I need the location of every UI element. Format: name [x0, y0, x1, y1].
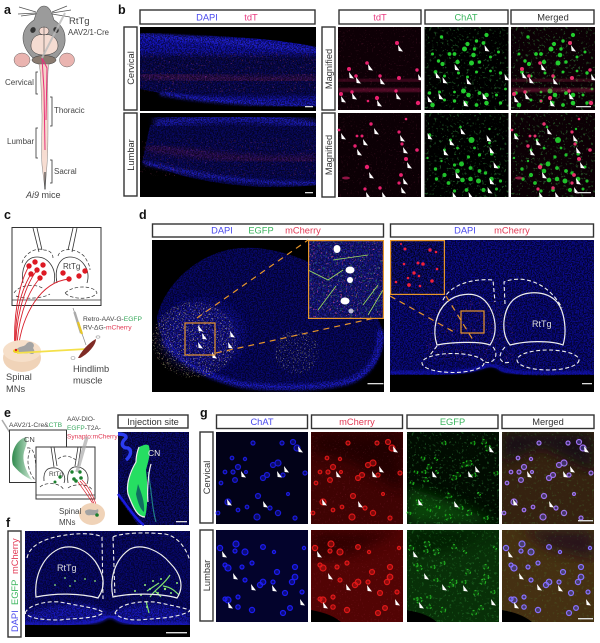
- header: tdT: [339, 10, 421, 24]
- header: DAPI tdT: DAPI: [196, 12, 218, 22]
- side label: DAPI EGFP mCherry: mCherry: [10, 538, 20, 574]
- header: DAPI EGFP mCherry: DAPI: [211, 226, 233, 236]
- text: RtTg: RtTg: [532, 319, 552, 329]
- panel b: spinal cord sections: [118, 3, 596, 198]
- header: ChAT: [216, 415, 308, 428]
- icon: spinal cord: [79, 503, 105, 525]
- header: Injection site: Injection site: [127, 417, 179, 427]
- image: whole section: [152, 240, 384, 392]
- dashed outlines: [27, 533, 190, 599]
- text and bracket: Lumbar: Lumbar: [7, 137, 34, 146]
- text: CN: CN: [148, 448, 160, 458]
- scale bar: [305, 106, 313, 107]
- panel d: brainstem images: [139, 208, 594, 392]
- header: Injection site: [118, 415, 188, 428]
- icon: injection needle: [42, 13, 65, 58]
- image: merged cervical: [511, 27, 595, 110]
- text: Spinal MNs: MNs: [59, 518, 75, 527]
- header: DAPI tdT: [140, 10, 315, 24]
- header: Merged: Merged: [532, 417, 564, 427]
- icon: spinal cord section: [3, 340, 41, 372]
- image: mCherry cervical: [310, 432, 403, 524]
- image: RtTg section: [390, 240, 594, 392]
- image: lumbar DAPI tdT: [140, 113, 316, 197]
- icon: spinal cord: [39, 64, 49, 190]
- text: Ai9 mice: Ai9 mice: [25, 190, 61, 200]
- side label: DAPI EGFP mCherry: DAPI: [10, 610, 20, 632]
- header: ChAT: ChAT: [250, 417, 274, 427]
- text and bracket: Lumbar: [7, 128, 38, 158]
- header: DAPI tdT: tdT: [244, 12, 258, 22]
- panel g: spinal MN images: [200, 406, 594, 622]
- side label: Lumbar: [124, 113, 137, 196]
- text: RtTg: RtTg: [63, 262, 80, 271]
- side label: Cervical: Cervical: [202, 461, 212, 494]
- header: Merged: [511, 10, 594, 24]
- panel e: injection schematic: [2, 406, 189, 527]
- image: ChAT cervical: [216, 432, 308, 524]
- image: cervical DAPI tdT: [140, 27, 316, 111]
- needle left: [2, 420, 12, 436]
- icon: injection pipette: [77, 437, 87, 472]
- text: virus labels: [83, 316, 143, 332]
- dashed zoom lines: [390, 296, 473, 340]
- header: DAPI mCherry: DAPI: [454, 226, 476, 236]
- icon: brain: [31, 27, 58, 64]
- image: ChAT lumbar: [216, 530, 308, 622]
- image: tdT cervical: [338, 27, 421, 110]
- orange square: [185, 323, 215, 355]
- label g: g: [200, 406, 208, 420]
- side label: DAPI EGFP mCherry: EGFP: [10, 580, 20, 605]
- image: ChAT lumbar: [424, 113, 508, 197]
- header: EGFP: [407, 415, 498, 428]
- text: Spinal MNs: MNs: [6, 384, 25, 394]
- text: AAV2/1-Cre&CTB: AAV2/1-Cre&CTB: [9, 422, 63, 429]
- scale bar: [582, 383, 592, 384]
- panel a: mouse schematic: [4, 3, 109, 200]
- scale bar: [166, 632, 187, 633]
- label f: f: [6, 516, 11, 530]
- image: merged cervical: [502, 432, 594, 524]
- text and bracket: Thoracic: [50, 97, 85, 126]
- header: DAPI mCherry: mCherry: [494, 226, 530, 236]
- scale bar: [305, 192, 313, 193]
- header: mCherry: mCherry: [339, 417, 375, 427]
- text: virus labels: RV-ΔG-mCherry: [83, 324, 132, 332]
- text and bracket: Sacral: [50, 160, 77, 183]
- scale bar: [368, 383, 384, 384]
- label d: d: [139, 208, 147, 222]
- text: Spinal MNs: Spinal: [6, 372, 32, 382]
- box: RtTg injection: [36, 437, 95, 499]
- red projection curves: [15, 266, 69, 350]
- text: Hindlimb muscle: Hindlimb: [73, 364, 109, 374]
- header: DAPI EGFP mCherry: mCherry: [285, 226, 321, 236]
- image: merged lumbar: [510, 113, 595, 197]
- brainstem box: [12, 228, 101, 306]
- image: tdT lumbar: [338, 113, 421, 197]
- text: virus labels: Retro-AAV-G-EGFP: [83, 316, 143, 323]
- header: mCherry: [312, 415, 402, 428]
- text: RtTg: RtTg: [69, 16, 90, 27]
- box: cochlear nucleus: [10, 430, 66, 482]
- image: EGFP lumbar: [407, 530, 499, 622]
- yellow tract to muscle: [17, 349, 86, 353]
- icon: ears: [14, 53, 74, 67]
- text: AAV2/1-Cre: AAV2/1-Cre: [68, 28, 109, 37]
- icon: whiskers: [18, 6, 71, 17]
- header: ChAT: ChAT: [454, 12, 478, 22]
- RtTg outlines: [435, 294, 495, 345]
- red projections to spinal cord: [78, 480, 98, 514]
- side label: Magnified lumbar: Magnified: [324, 135, 334, 175]
- side label: Magnified cervical: Magnified: [324, 49, 334, 89]
- header: EGFP: EGFP: [440, 417, 465, 427]
- side label: Cervical: [124, 27, 137, 110]
- header: DAPI EGFP mCherry: EGFP: [248, 226, 274, 236]
- side label: Lumbar: Lumbar: [202, 560, 212, 591]
- label c: c: [4, 208, 11, 222]
- text and bracket: Cervical: [5, 72, 38, 94]
- inset: magnified RtTg: [390, 240, 445, 295]
- inset: magnified neurons: [308, 240, 384, 319]
- text: AAV-DIO label: AAV-DIO-: [67, 416, 95, 423]
- text: RtTg: RtTg: [57, 563, 77, 573]
- text and bracket: Sacral: Sacral: [54, 167, 77, 176]
- label e: e: [4, 406, 11, 420]
- image: RtTg section: [24, 531, 190, 637]
- scale bar: [576, 106, 591, 107]
- side label: DAPI EGFP mCherry: [8, 531, 21, 637]
- side label: Cervical: Cervical: [126, 51, 136, 85]
- panel f: RtTg terminals: [6, 516, 190, 637]
- orange square: [461, 311, 484, 333]
- text: RtTg: RtTg: [49, 471, 63, 478]
- header: tdT: tdT: [373, 12, 387, 22]
- header: DAPI mCherry: [390, 224, 594, 237]
- scale bar: [576, 192, 591, 193]
- RtTg outlines: [36, 547, 103, 598]
- side label: Lumbar: [200, 530, 213, 621]
- image: EGFP cervical: [406, 432, 499, 524]
- side label: Magnified lumbar: [322, 113, 335, 197]
- scale bar: [176, 521, 187, 522]
- text: Hindlimb muscle: muscle: [73, 376, 102, 386]
- image: injection site: [117, 432, 189, 526]
- label a: a: [4, 3, 12, 17]
- icon: syringe: [73, 308, 86, 345]
- dashed zoom lines: [197, 240, 384, 353]
- header: ChAT: [425, 10, 508, 24]
- side label: Magnified cervical: [322, 27, 335, 110]
- scale bar: [578, 520, 593, 521]
- scale bar: [578, 618, 593, 619]
- image: ChAT cervical: [424, 27, 508, 110]
- dashed outlines: [430, 279, 562, 363]
- green neurons: [54, 470, 83, 484]
- header: Merged: Merged: [537, 12, 569, 22]
- header: DAPI EGFP mCherry: [152, 224, 384, 237]
- text and bracket: Thoracic: Thoracic: [54, 106, 85, 115]
- text: Spinal MNs: Spinal: [59, 507, 81, 516]
- panel c: circuit schematic: [3, 208, 143, 394]
- text: AAV-DIO label: EGFP-T2A-: [67, 425, 101, 432]
- image: merged lumbar: [502, 530, 594, 622]
- red neurons: [26, 259, 88, 282]
- side label: Cervical: [200, 432, 213, 523]
- side label: Lumbar: Lumbar: [126, 139, 136, 171]
- label b: b: [118, 3, 126, 17]
- text: CN: CN: [24, 435, 35, 444]
- text and bracket: Cervical: Cervical: [5, 78, 34, 87]
- image: mCherry lumbar: [311, 530, 403, 622]
- EGFP signal: [146, 575, 179, 613]
- header: Merged: [502, 415, 594, 428]
- icon: mouse head: [23, 6, 65, 58]
- icon: hindlimb muscle: [71, 336, 100, 360]
- text: AAV-DIO label: Synapto:mCherry: [67, 434, 118, 440]
